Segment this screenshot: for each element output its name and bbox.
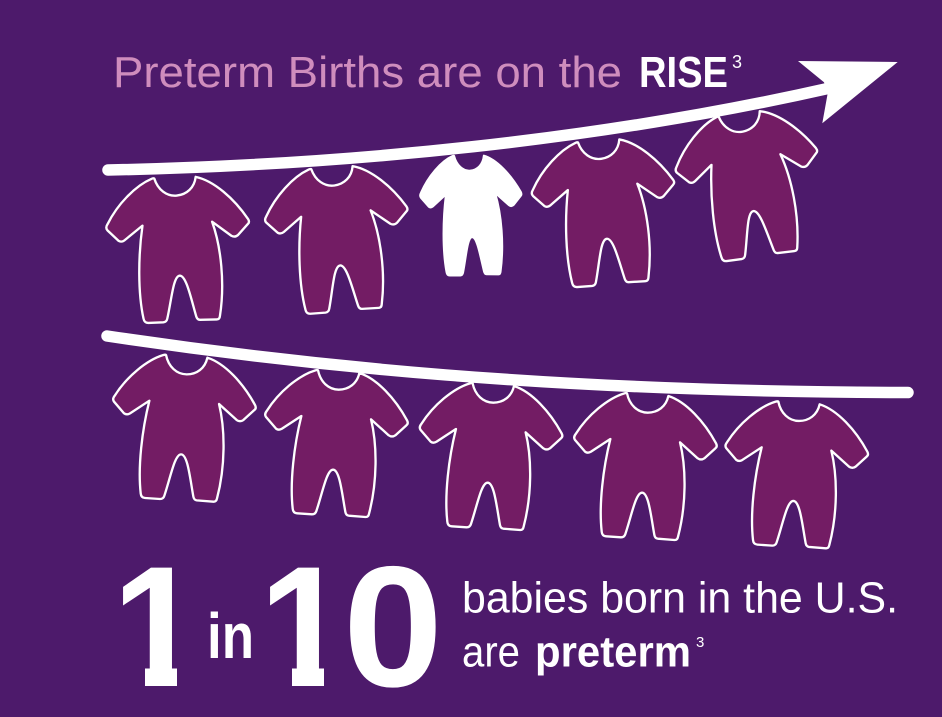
bottom row of baby onesies (113, 355, 868, 548)
statistic caption (462, 574, 898, 676)
onesie 2 (259, 156, 421, 322)
title: RISE (639, 48, 728, 97)
onesie 7 (265, 370, 408, 517)
onesie 5 (667, 99, 836, 271)
statistic: 1 in 10 (112, 531, 443, 717)
statistic caption: 3 (696, 634, 704, 651)
onesie 4 (526, 130, 687, 295)
top row of baby onesies (102, 99, 836, 330)
onesie 3: white highlighted (417, 150, 528, 281)
onesie 6 (113, 355, 256, 502)
statistic caption: babies born in the U.S. (462, 574, 898, 622)
title: 3 (732, 52, 742, 72)
statistic caption: are (462, 628, 520, 676)
arrow: rising clothesline (108, 61, 898, 170)
onesie 8 (420, 383, 562, 530)
lower clothesline (107, 336, 908, 392)
onesie 1 (102, 169, 259, 330)
onesie 9 (574, 393, 717, 540)
statistic: 1 in 10: in (207, 600, 254, 672)
statistic caption: preterm (535, 628, 691, 676)
onesie 10 (725, 401, 868, 548)
title: Preterm Births are on the (113, 48, 622, 97)
